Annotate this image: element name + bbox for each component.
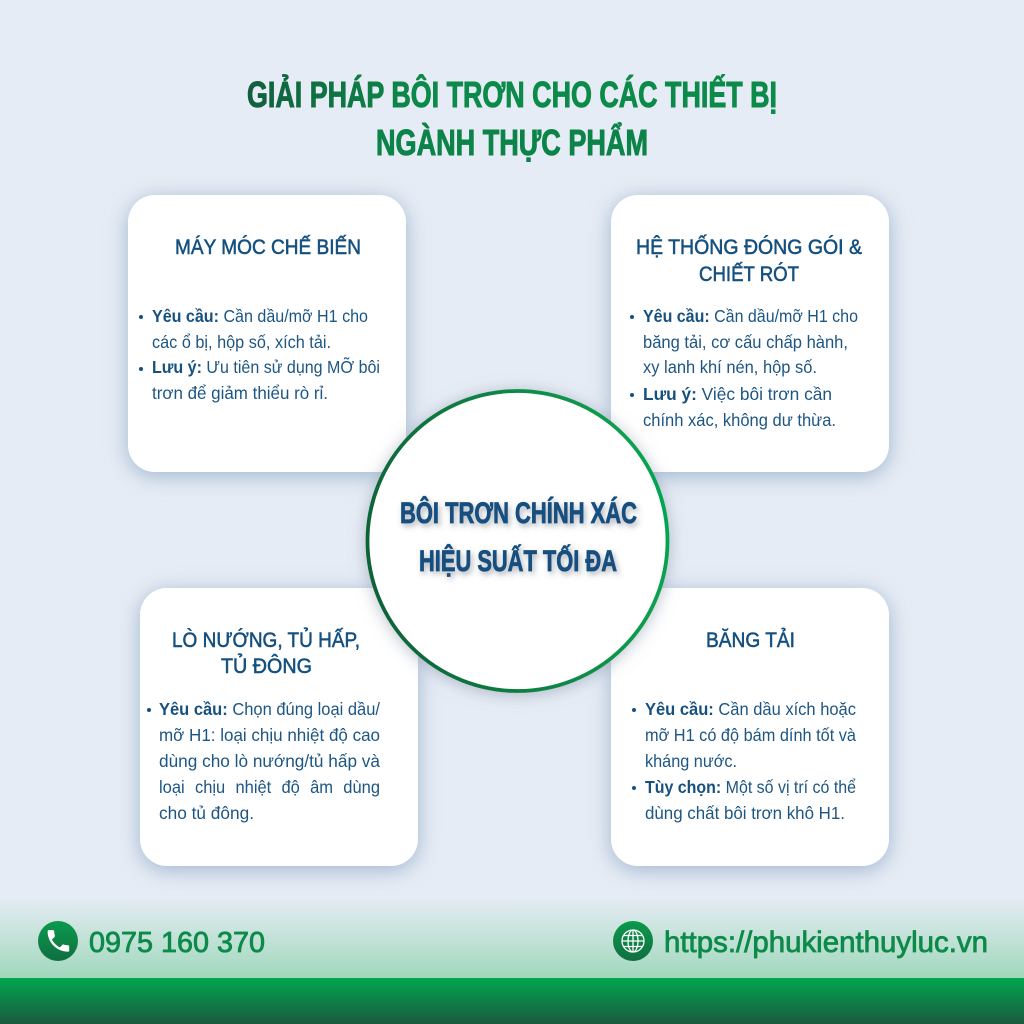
phone number: 0975 160 370 [89,927,265,959]
list: băng tải: dùng chất bôi trơn khô H1. [645,803,845,823]
list: lò nướng: Yêu cầu: Chọn đúng loại dầu/ [159,699,380,719]
title [247,73,777,163]
list: hệ thống đóng gói: xy lanh khí nén, hộp số. [643,357,817,377]
center circle [368,391,668,691]
center text [400,496,637,578]
heading: hệ thống đóng gói: HỆ THỐNG ĐÓNG GÓI & [636,233,862,259]
website url: https://phukienthuyluc.vn [664,926,988,959]
heading: băng tải: BĂNG TẢI [706,627,795,652]
heading: hệ thống đóng gói: CHIẾT RÓT [699,261,799,286]
center text: BÔI TRƠN CHÍNH XÁC [400,496,637,530]
icon: globe [613,921,653,961]
title: NGÀNH THỰC PHẨM [376,121,648,163]
center text: HIỆU SUẤT TỐI ĐA [419,544,617,578]
list: băng tải: mỡ H1 có độ bám dính tốt và [645,725,856,745]
list: hệ thống đóng gói: chính xác, không dư thừa. [643,410,836,430]
heading: lò nướng: TỦ ĐÔNG [221,653,312,678]
list: hệ thống đóng gói [630,306,858,430]
list: lò nướng: cho tủ đông. [159,803,254,823]
list: máy móc chế biến: Yêu cầu: Cần dầu/mỡ H1 cho [152,306,368,326]
panel: băng tải [611,588,889,866]
list: băng tải: kháng nước. [645,751,737,771]
list: máy móc chế biến: trơn để giảm thiểu rò rỉ. [152,383,328,403]
list: băng tải [632,699,856,823]
list: hệ thống đóng gói: băng tải, cơ cấu chấp hành, [643,332,848,352]
heading: lò nướng: LÒ NƯỚNG, TỦ HẤP, [172,627,360,652]
list: lò nướng: mỡ H1: loại chịu nhiệt độ cao [159,725,380,745]
list: băng tải: Yêu cầu: Cần dầu xích hoặc [645,699,856,719]
title: GIẢI PHÁP BÔI TRƠN CHO CÁC THIẾT BỊ [247,73,777,115]
list: băng tải: Tùy chọn: Một số vị trí có thể [645,777,856,797]
icon: phone [38,921,78,961]
footer green band [0,978,1024,1024]
footer gradient [0,897,1024,978]
heading: máy móc chế biến: MÁY MÓC CHẾ BIẾN [175,234,361,259]
list: máy móc chế biến [139,306,380,403]
panel: lò nướng, tủ hấp, tủ đông [140,588,418,866]
list: lò nướng [147,699,380,823]
list: hệ thống đóng gói: Yêu cầu: Cần dầu/mỡ H1 cho [643,306,858,326]
list: máy móc chế biến: các ổ bị, hộp số, xích tải. [152,332,331,352]
heading: lò nướng [172,627,360,678]
list: lò nướng: loại chịu nhiệt độ âm dùng [159,777,380,797]
panel: máy móc chế biến [128,195,406,472]
list: hệ thống đóng gói: Lưu ý: Việc bôi trơn cần [643,384,832,404]
list: máy móc chế biến: Lưu ý: Ưu tiên sử dụng MỠ bôi [152,356,380,377]
heading: hệ thống đóng gói [636,233,862,286]
panel: hệ thống đóng gói và chiết rót [611,195,889,472]
list: lò nướng: dùng cho lò nướng/tủ hấp và [159,751,380,771]
